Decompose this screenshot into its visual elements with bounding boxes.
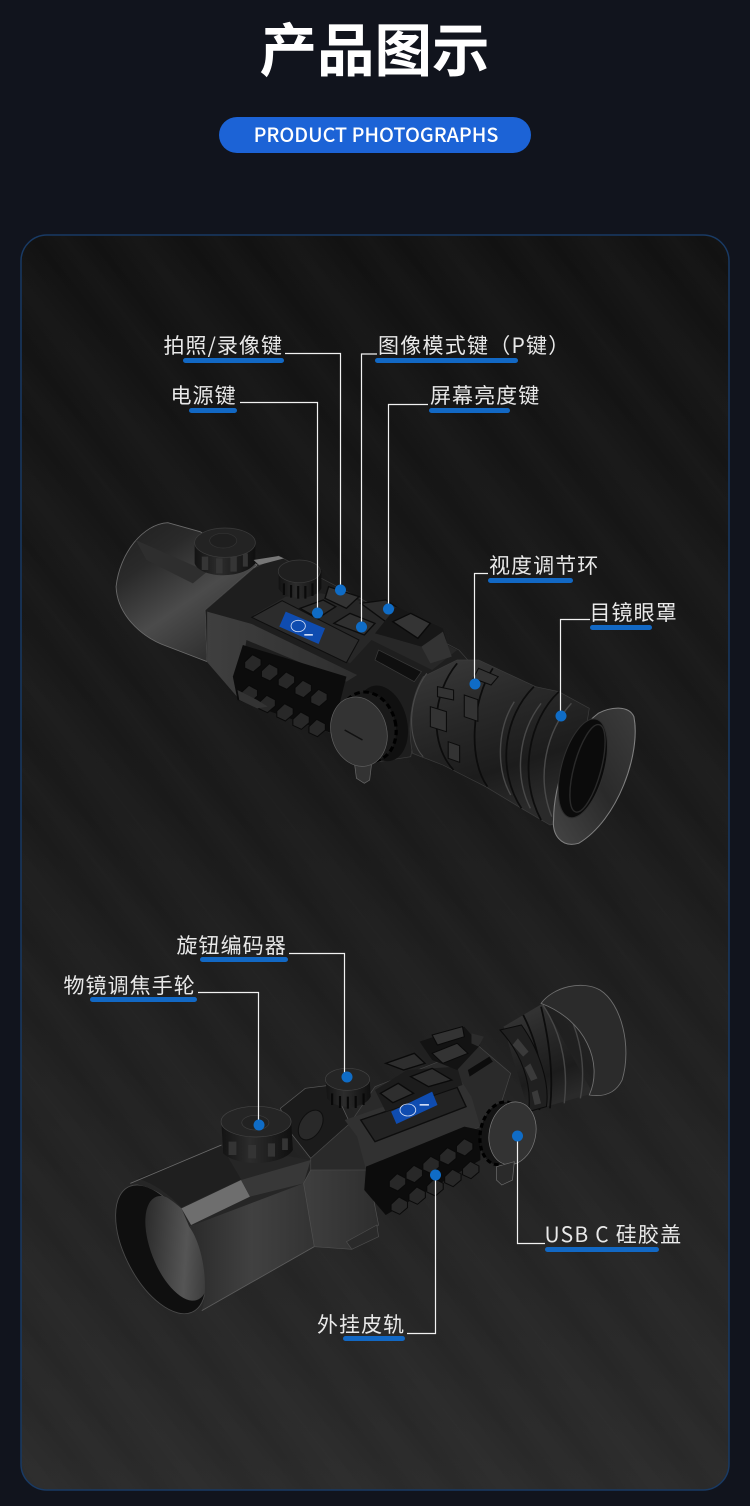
callout: 拍照/录像键 [164,330,346,596]
subtitle pill: PRODUCT PHOTOGRAPHS [254,119,498,148]
callout: 屏幕亮度键 [383,380,540,614]
callout: 目镜眼罩: 目镜眼罩 [590,597,678,627]
callout: 拍照/录像键: 拍照/录像键 [164,330,283,360]
callout: 图像模式键（P键）: 图像模式键（P键） [378,330,571,360]
product image: scope top view [116,523,635,844]
USB C cover [324,681,415,771]
focus ring eyepiece [410,660,589,825]
USB C cover [475,1098,541,1185]
callout: 旋钮编码器 [176,930,352,1082]
callout: 图像模式键（P键） [356,330,571,632]
body [280,1027,511,1249]
callout: 外挂皮轨: 外挂皮轨 [317,1309,405,1339]
callout: 电源键: 电源键 [170,380,237,410]
objective lens [97,1172,224,1326]
callout: 屏幕亮度键: 屏幕亮度键 [430,380,540,410]
callout: 视度调节环: 视度调节环 [489,550,599,580]
eyecup [549,708,635,844]
callout: 旋钮编码器: 旋钮编码器 [176,930,287,960]
knob: focus wheel [221,1106,293,1163]
subtitle pill [219,117,531,153]
knob: rotary encoder [325,1068,371,1109]
product image: scope bottom view [97,985,626,1326]
callout: 视度调节环 [470,550,599,690]
callout: 物镜调焦手轮 [64,970,264,1130]
callout: USB C 硅胶盖 [512,1130,682,1252]
knob: focus wheel [195,528,255,575]
badge: brand logo [279,612,325,644]
callout: 目镜眼罩 [556,597,678,722]
callout: USB C 硅胶盖: USB C 硅胶盖 [544,1219,682,1249]
knob: rotary encoder [278,560,321,599]
title: 产品图示 [260,4,490,88]
objective barrel [130,1145,314,1311]
callout: 外挂皮轨 [317,1170,441,1341]
panel: product photographs [21,235,729,1490]
badge: brand logo [391,1092,437,1124]
eyepiece [500,985,626,1112]
callout: 物镜调焦手轮: 物镜调焦手轮 [64,970,196,1000]
callout: 电源键 [170,380,323,618]
